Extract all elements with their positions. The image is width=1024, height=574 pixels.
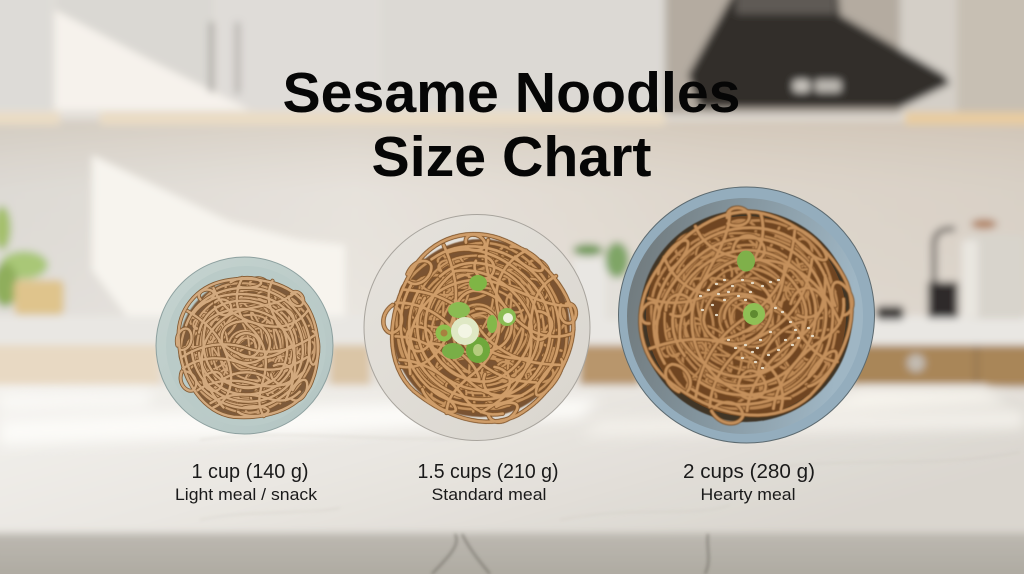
label: large bowl: 2 cups (280 g) (683, 461, 815, 483)
range hood (688, 0, 950, 108)
sunlight patch on wall (92, 155, 345, 320)
marble top (0, 385, 1024, 535)
bowl: large, 2 cups (560, 129, 930, 500)
marble front edge (0, 533, 1024, 574)
label: medium bowl: Standard meal (432, 485, 546, 504)
noodles: medium bowl (318, 164, 645, 491)
wall (0, 120, 1024, 325)
label: large bowl (683, 461, 815, 504)
noodles: large bowl (560, 129, 930, 500)
noodles: small bowl (157, 255, 339, 437)
left plant (0, 206, 11, 250)
garnish: green onion slices (436, 275, 516, 363)
upper cabinets (0, 0, 52, 110)
bowl: small, 1 cup (156, 255, 339, 437)
bowl: medium, 1.5 cups (318, 164, 645, 491)
label: medium bowl (418, 461, 558, 504)
label: small bowl: Light meal / snack (175, 485, 318, 504)
faucet and jars (934, 229, 955, 318)
label: medium bowl: 1.5 cups (210 g) (418, 461, 558, 483)
label: small bowl: 1 cup (140 g) (192, 461, 308, 483)
label: large bowl: Hearty meal (700, 485, 796, 504)
title (282, 61, 740, 189)
range hood alcove (665, 0, 905, 115)
title: Sesame Noodles (282, 61, 740, 125)
garnish: sesame seeds (700, 280, 813, 368)
centre plant (573, 258, 607, 318)
under-cabinet light strip (0, 112, 60, 125)
label: small bowl (175, 461, 318, 504)
garnish: green onion slices (737, 250, 765, 325)
counter back and lower cabinets (0, 316, 1024, 346)
title: Size Chart (372, 125, 652, 189)
